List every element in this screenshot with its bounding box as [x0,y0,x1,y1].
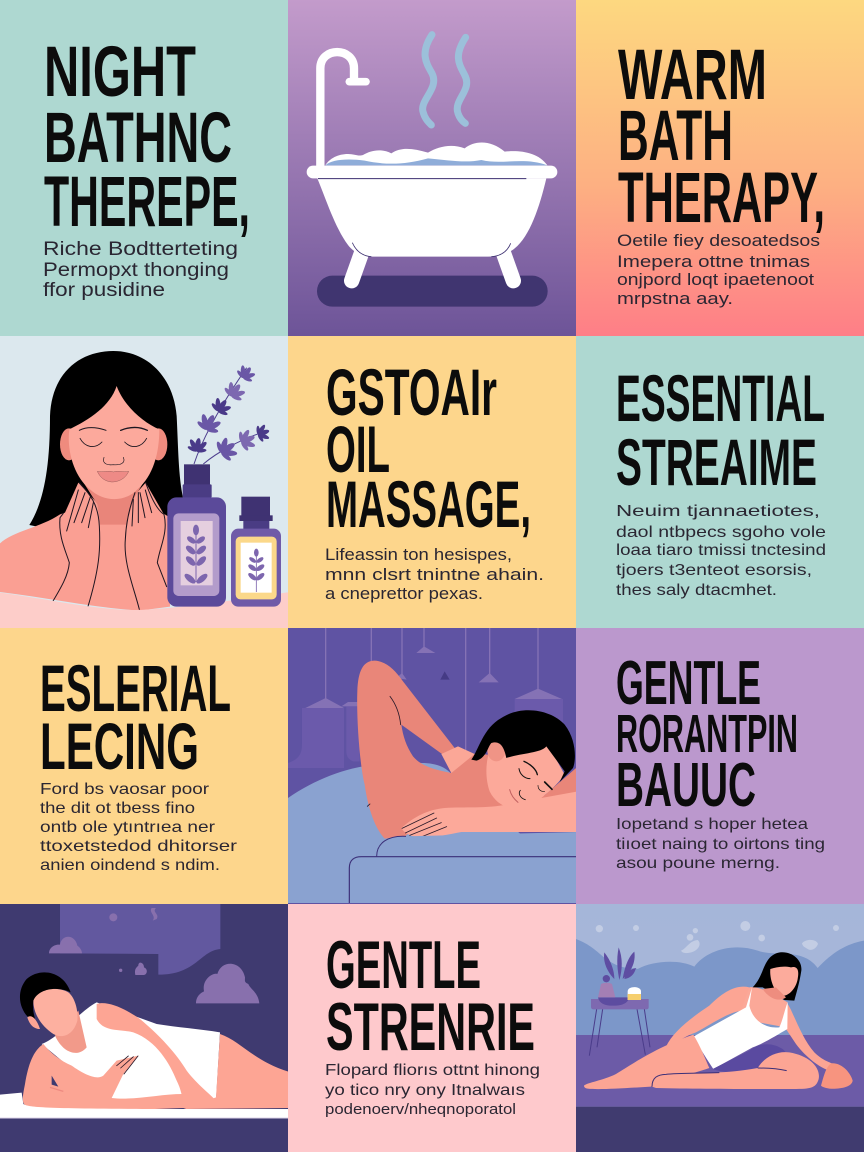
icon: tub rim [307,166,557,178]
illustration: neck shadow [79,476,147,525]
heading: night bathing [44,33,250,242]
heading: eslerial: LECING [40,709,199,783]
body text: gentle rorantpin [616,816,825,872]
body text: eslerial: ttoxetstedod dhitorser [40,838,238,855]
body text: oil massage [325,546,544,603]
heading: oil massage: MASSAGE, [326,467,531,541]
illustration: arm and elbow [23,1044,183,1110]
panel: night bathing text [0,0,288,336]
body text: eslerial: ontb ole ytıntrıea ner [40,819,216,836]
heading: night bathing: BATHNC [44,99,232,178]
heading: warm bath therapy: WARM [618,36,767,115]
panel: woman with essential oils [0,336,290,628]
body text: eslerial [40,781,238,874]
body text: gentle rorantpin: tiıoet naing to oirtons ting [616,836,825,853]
illustration: man's back and arm [357,661,535,839]
icon: lips [97,471,129,482]
body text: warm bath therapy: onjpord loqt ipaetenoot [617,271,814,289]
panel: resting person illustration [0,904,288,1152]
illustration: shorts [713,1044,786,1072]
body text: gentle stretch [325,1062,540,1118]
panel: eslerial text [0,628,288,904]
heading: eslerial: ESLERIAL [40,651,231,725]
icon: finger lines [117,1056,138,1074]
shape: hills [576,939,864,1037]
icon: side table with plant and candle [589,947,650,1056]
illustration: shoulders and hands [0,483,170,611]
body text: essential: tjoers t3enteot esorsis, [616,562,812,579]
shape: pink foreground [0,592,290,628]
body text: essential [616,503,826,599]
body text: eslerial: the dit ot tbess fino [40,800,195,817]
illustration: shoulder highlight [441,746,475,773]
illustration: hair [753,952,801,1001]
illustration: arm across torso [97,1003,216,1108]
panel: gentle stretch text [288,904,576,1152]
illustration: woman [0,386,170,611]
icon: large oil bottle [167,464,226,607]
heading: essential [616,361,825,499]
heading: gentle stretch [326,927,535,1065]
heading: gentle rorantpin bauuc: BAUUC [616,751,756,820]
illustration: neck [55,1011,87,1053]
icon: shower faucet [320,52,366,167]
shape: floor [576,1035,864,1107]
body text: essential: Neuim tjannaetiotes, [616,503,820,520]
illustration: short hair [20,972,71,1019]
illustration: bent leg [652,1052,819,1089]
icon: steam waves [423,35,467,125]
body text: night bathing: ffor pusidine [43,280,165,301]
heading: oil massage: GSTOAIr [326,355,497,429]
body text: eslerial: Ford bs vaosar poor [40,781,210,798]
body text: oil massage: mnn clsrt tnintne ahain. [325,566,544,584]
heading: eslerial [40,651,231,783]
illustration: near arm [666,987,749,1047]
icon: massage finger lines [367,696,447,837]
body text: night bathing [43,239,238,301]
illustration: faceless head [33,989,78,1036]
icon: small oil bottle [231,497,281,607]
icon: bathtub body [317,178,546,257]
body text: warm bath therapy: Imepera ottne tnimas [617,253,810,271]
body text: night bathing: Riche Bodtterteting [43,239,238,260]
body text: warm bath therapy [617,232,820,308]
panel: warm bath therapy text [576,0,864,336]
icon: hanging lamps [288,628,563,768]
body text: gentle stretch: Flopard fliorıs ottnt hinong [325,1062,540,1079]
body text: essential: thes saly dtacmhet. [616,582,777,599]
icon: floating bubbles [596,921,839,953]
body text: oil massage: Lifeassin ton hesispes, [325,546,512,564]
heading: oil massage [326,355,531,541]
shape: white bed sheet [0,1093,288,1118]
body text: night bathing: Permopxt thonging [43,260,229,281]
illustration: forearm and hand [401,791,578,837]
heading: gentle stretch: STRENRIE [326,989,535,1065]
body text: warm bath therapy: mrpstna aay. [617,290,733,308]
heading: night bathing: THEREPE, [44,163,250,242]
illustration: extended leg [584,1035,709,1089]
illustration: face [770,967,798,996]
heading: warm bath therapy [618,36,825,238]
illustration: ears [60,428,167,460]
heading: gentle rorantpin bauuc: GENTLE [616,649,761,718]
body text: eslerial: anien oindend s ndim. [40,857,220,874]
illustration: man's head [471,710,575,808]
body text: gentle stretch: yo tico nry ony Itnalwaıs [325,1082,525,1099]
heading: warm bath therapy: BATH [618,97,733,176]
body text: gentle rorantpin: Iopetand s hoper hetea [616,816,808,833]
shape: blue blanket [288,763,578,903]
icon: closed eyes and brows [79,427,147,465]
icon: tub feet [352,252,513,281]
body text: warm bath therapy: Oetile fiey desoatedsos [617,232,820,250]
icon: bath water and foam [325,142,547,165]
heading: gentle stretch: GENTLE [326,927,481,1003]
illustration: lower body [183,1034,288,1109]
panel: oil massage text [288,336,576,628]
illustration: white tank top [693,987,788,1069]
icon: woman hair [29,351,183,533]
heading: oil massage: OIL [326,412,390,486]
body text: oil massage: a cneprettor pexas. [325,585,483,603]
illustration: woman's far arm [783,1004,839,1071]
illustration: white top [42,1002,220,1101]
icon: clouds [49,908,259,1003]
heading: gentle rorantpin bauuc [616,649,798,820]
icon: bath mat [317,276,548,307]
shape: pillow and bed [349,832,578,903]
icon: lavender sprigs [186,362,272,464]
body text: gentle rorantpin: asou poune merng. [616,855,780,872]
panel: essential text [576,336,864,628]
illustration: face [69,386,159,499]
panel: bathtub illustration [288,0,576,336]
shape: window [60,904,220,975]
illustration: chest [741,987,788,1027]
illustration: foot and hand [821,1063,853,1089]
body text: gentle stretch: podenoerv/nheqnoporatol [325,1101,516,1118]
body text: essential: daol ntbpecs sgoho vole [616,524,826,541]
panel: gentle rotation text [576,628,864,904]
body text: essential: loaa tiaro tmissi tnctesind [616,542,826,559]
heading: night bathing: NIGHT [44,33,196,112]
panel: back massage illustration [288,628,578,904]
icon: hand outlines [52,483,167,609]
panel: stretching woman illustration [576,904,864,1152]
